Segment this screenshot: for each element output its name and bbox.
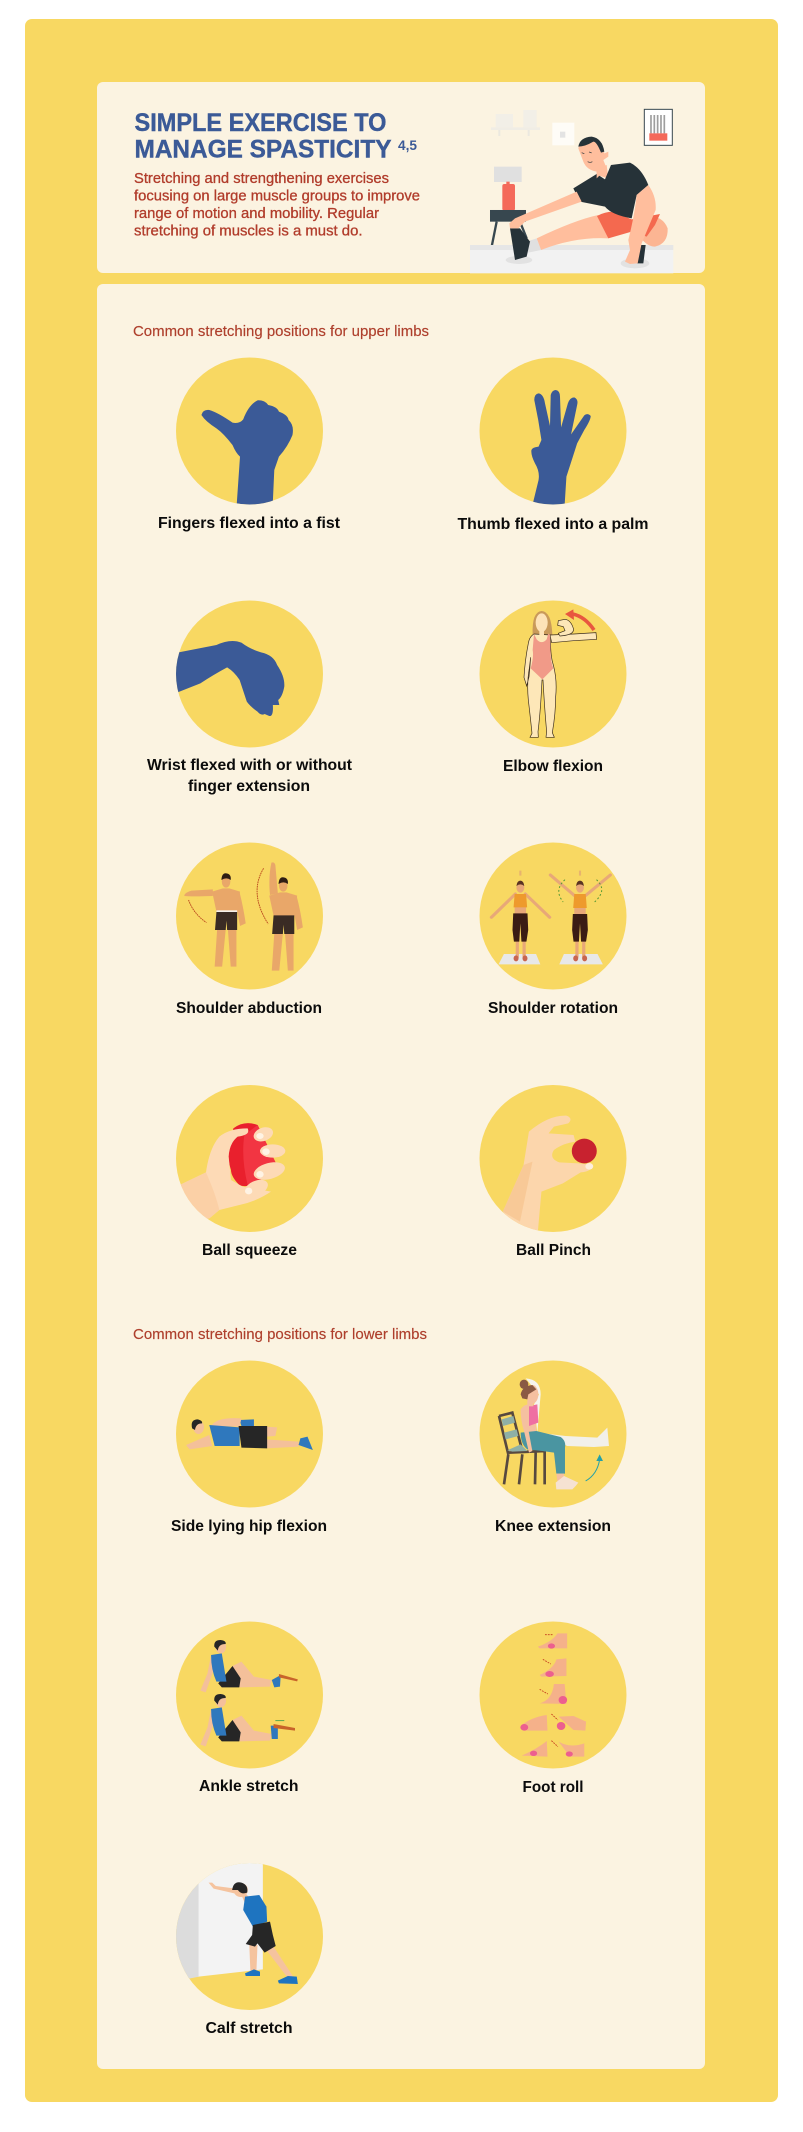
card: foot roll	[480, 1622, 626, 1796]
intro text: focusing on large muscle groups to improve	[134, 188, 420, 204]
icon: flexed wrist	[174, 641, 284, 716]
label: Foot roll	[522, 1779, 584, 1796]
title	[134, 109, 417, 164]
card: ball pinch	[480, 1085, 626, 1259]
icon: woman seated on chair extending knee	[499, 1378, 609, 1489]
title: SIMPLE EXERCISE TO	[134, 109, 386, 137]
label: Ankle stretch	[199, 1778, 298, 1795]
figure: upper	[200, 1640, 298, 1692]
label: Ball Pinch	[516, 1242, 591, 1259]
card: ball squeeze	[173, 1085, 323, 1259]
label: Shoulder abduction	[176, 1000, 322, 1017]
card: side lying hip flexion	[171, 1360, 327, 1535]
label: Thumb flexed into a palm	[458, 516, 648, 533]
card: fingers flexed into a fist	[158, 358, 341, 532]
card: ankle stretch	[176, 1622, 323, 1795]
icon: hand squeezing red ball	[180, 1123, 286, 1219]
icon: two men raising arm	[184, 862, 303, 971]
label: finger extension	[188, 778, 310, 795]
heading: lower limbs: Common stretching positions for lower limbs	[133, 1327, 427, 1343]
intro text: Stretching and strengthening exercises	[134, 171, 389, 187]
intro text: range of motion and mobility. Regular	[134, 206, 379, 222]
title: 4,5	[398, 137, 417, 153]
card: calf stretch	[174, 1857, 323, 2037]
label: Knee extension	[495, 1518, 611, 1535]
icon: two women rotating shoulders	[491, 871, 610, 964]
icon: man pushing against wall	[174, 1857, 298, 1984]
card: knee extension	[480, 1360, 626, 1535]
figure: lower	[200, 1694, 295, 1746]
icon: foot roll sequence	[520, 1633, 586, 1757]
card: shoulder rotation	[480, 842, 626, 1017]
card: thumb flexed into a palm	[458, 358, 648, 533]
label: Ball squeeze	[202, 1242, 297, 1259]
icon: open hand with thumb flexed	[531, 390, 591, 505]
panel: header	[97, 82, 705, 273]
icon: man lying on side	[186, 1418, 313, 1450]
panel: exercises	[97, 284, 705, 2069]
icon: thumbs-up fist	[201, 400, 293, 505]
title: MANAGE SPASTICITY	[134, 136, 392, 164]
label: Shoulder rotation	[488, 1000, 618, 1017]
label: Elbow flexion	[503, 758, 603, 775]
icon: woman flexing elbow	[524, 609, 597, 737]
intro text	[134, 171, 420, 240]
card: wrist flexed	[147, 600, 353, 795]
label	[147, 757, 353, 795]
label: Fingers flexed into a fist	[158, 515, 341, 532]
illustration: man stretching	[470, 109, 673, 273]
icon: fingers pinching ball	[503, 1116, 597, 1232]
card: shoulder abduction	[176, 842, 323, 1017]
icon: seated man stretching ankle with band	[200, 1640, 298, 1746]
heading: upper limbs: Common stretching positions for upper limbs	[133, 324, 429, 340]
card: elbow flexion	[480, 600, 626, 775]
label: Calf stretch	[206, 2020, 292, 2037]
label: Wrist flexed with or without	[147, 757, 353, 774]
label: Side lying hip flexion	[171, 1518, 327, 1535]
intro text: stretching of muscles is a must do.	[134, 224, 362, 240]
